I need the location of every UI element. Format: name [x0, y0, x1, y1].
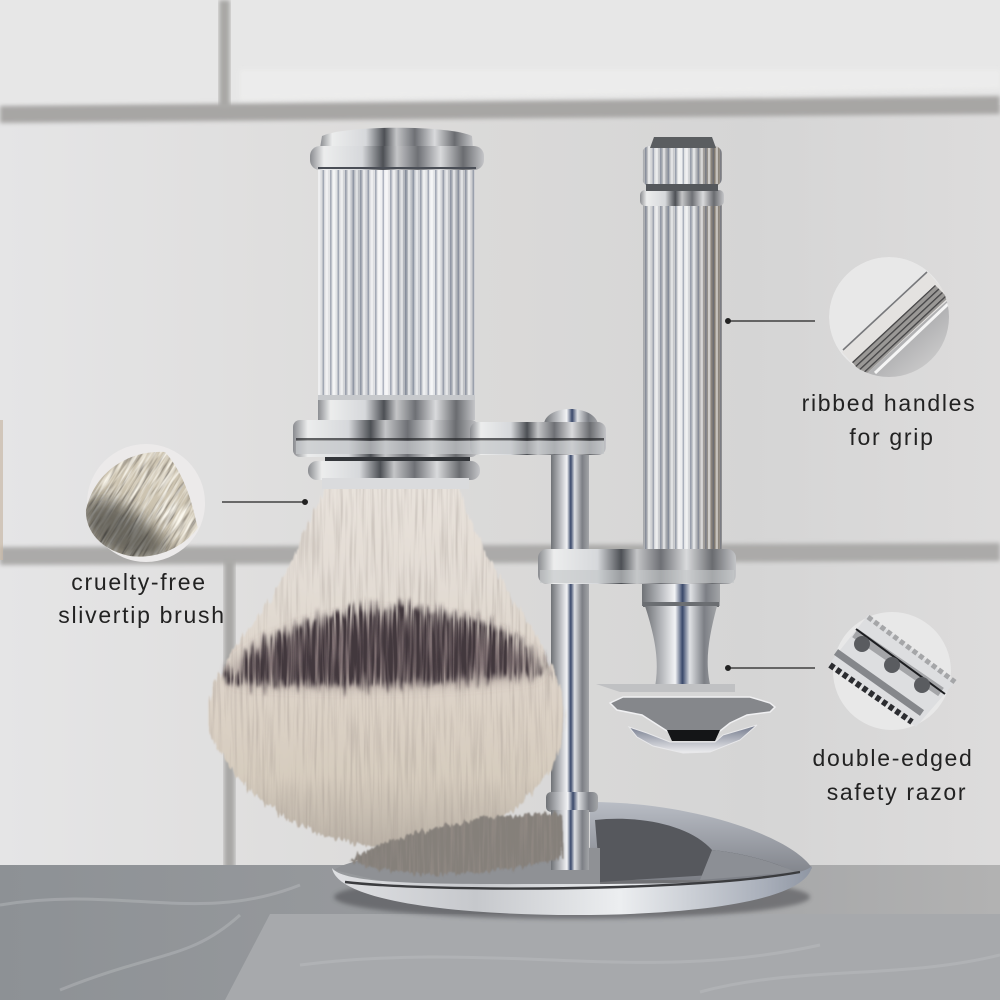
stand lower arm	[538, 549, 736, 584]
base dome	[590, 802, 812, 880]
stand upper arm	[293, 409, 606, 457]
brush cap	[310, 128, 484, 170]
stand post	[546, 450, 598, 870]
brush dark band	[222, 606, 548, 686]
icon: ribbed handle	[829, 257, 949, 377]
razor neck	[642, 584, 720, 692]
razor handle	[640, 137, 724, 550]
label: handles: ribbed handles	[802, 390, 976, 416]
callout: handle detail	[802, 257, 976, 450]
razor head	[596, 684, 775, 753]
base shadow	[334, 875, 810, 919]
label: brush: cruelty-free	[71, 569, 207, 595]
razor lower plate	[629, 725, 757, 753]
label: razor: safety razor	[827, 779, 967, 805]
label: handles: for grip	[849, 424, 935, 450]
arm knob	[544, 409, 598, 424]
razor top plate	[610, 697, 775, 731]
shaving brush	[208, 128, 565, 874]
base plate left	[334, 847, 600, 892]
brush collar	[308, 454, 480, 489]
icon: razor blade	[829, 612, 955, 730]
leader lines	[222, 319, 815, 670]
label: brush: slivertip brush	[58, 602, 226, 628]
brush knot	[208, 486, 565, 848]
callout: brush detail	[59, 444, 223, 628]
callout: razor detail	[812, 612, 974, 805]
stand base	[332, 802, 812, 919]
razor back plate	[596, 684, 735, 692]
brush band shadow	[232, 618, 540, 682]
brush base reflection	[350, 814, 562, 874]
brush handle ribbed	[318, 165, 475, 420]
razor slot	[667, 730, 720, 741]
marble counter	[0, 865, 1000, 1000]
base rim	[332, 866, 812, 915]
base reflection	[595, 819, 790, 882]
icon: brush tuft	[86, 444, 205, 562]
label: razor: double-edged	[812, 745, 974, 771]
